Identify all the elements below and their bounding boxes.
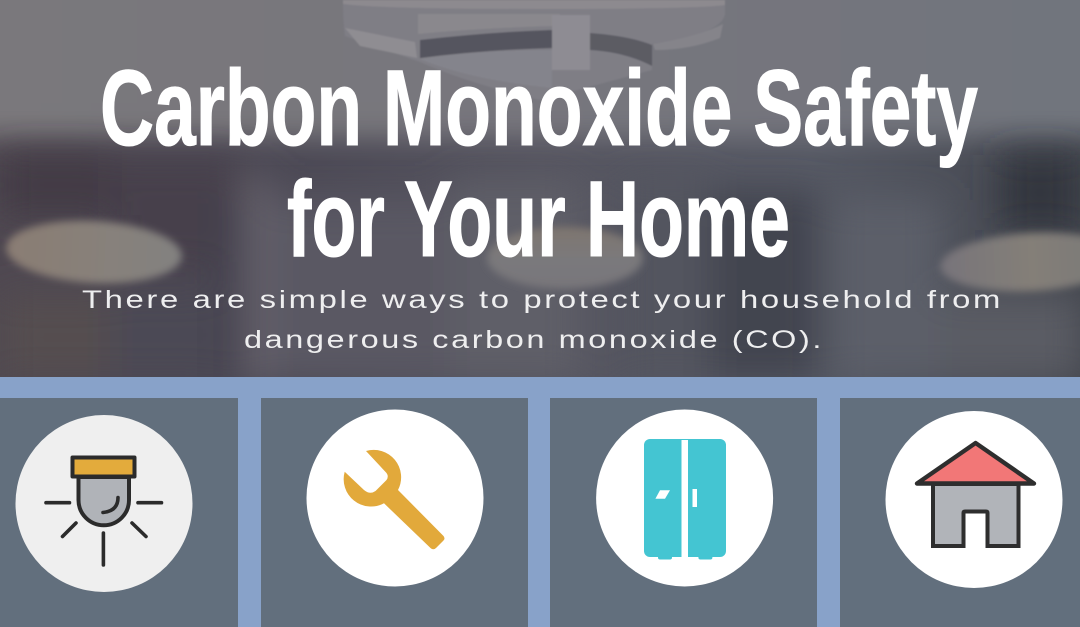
- blue band and column dividers: [0, 377, 1080, 627]
- panel: appliances column: [550, 398, 817, 627]
- panel: CO alarm column: [0, 398, 238, 627]
- icon: refrigerator: [596, 410, 773, 586]
- blurred ceiling light, left: [4, 216, 184, 288]
- subtitle: [82, 286, 1003, 354]
- panel: maintenance column: [261, 398, 528, 627]
- icon: ceiling light alarm: [16, 415, 192, 592]
- icon: wrench: [306, 410, 484, 586]
- subtitle: There are simple ways to protect your household from: [82, 286, 1003, 314]
- subtitle: dangerous carbon monoxide (CO).: [244, 326, 824, 354]
- title: [100, 47, 978, 279]
- title: for Your Home: [287, 158, 790, 279]
- blurred ceiling light, right: [939, 228, 1080, 296]
- blurred ceiling light, centre: [487, 227, 643, 289]
- smoke alarm: [343, 0, 725, 100]
- icon: house: [886, 411, 1062, 588]
- panel: home column: [840, 398, 1080, 627]
- hero background: blurred photo of ceiling and smoke alarm: [0, 0, 1080, 385]
